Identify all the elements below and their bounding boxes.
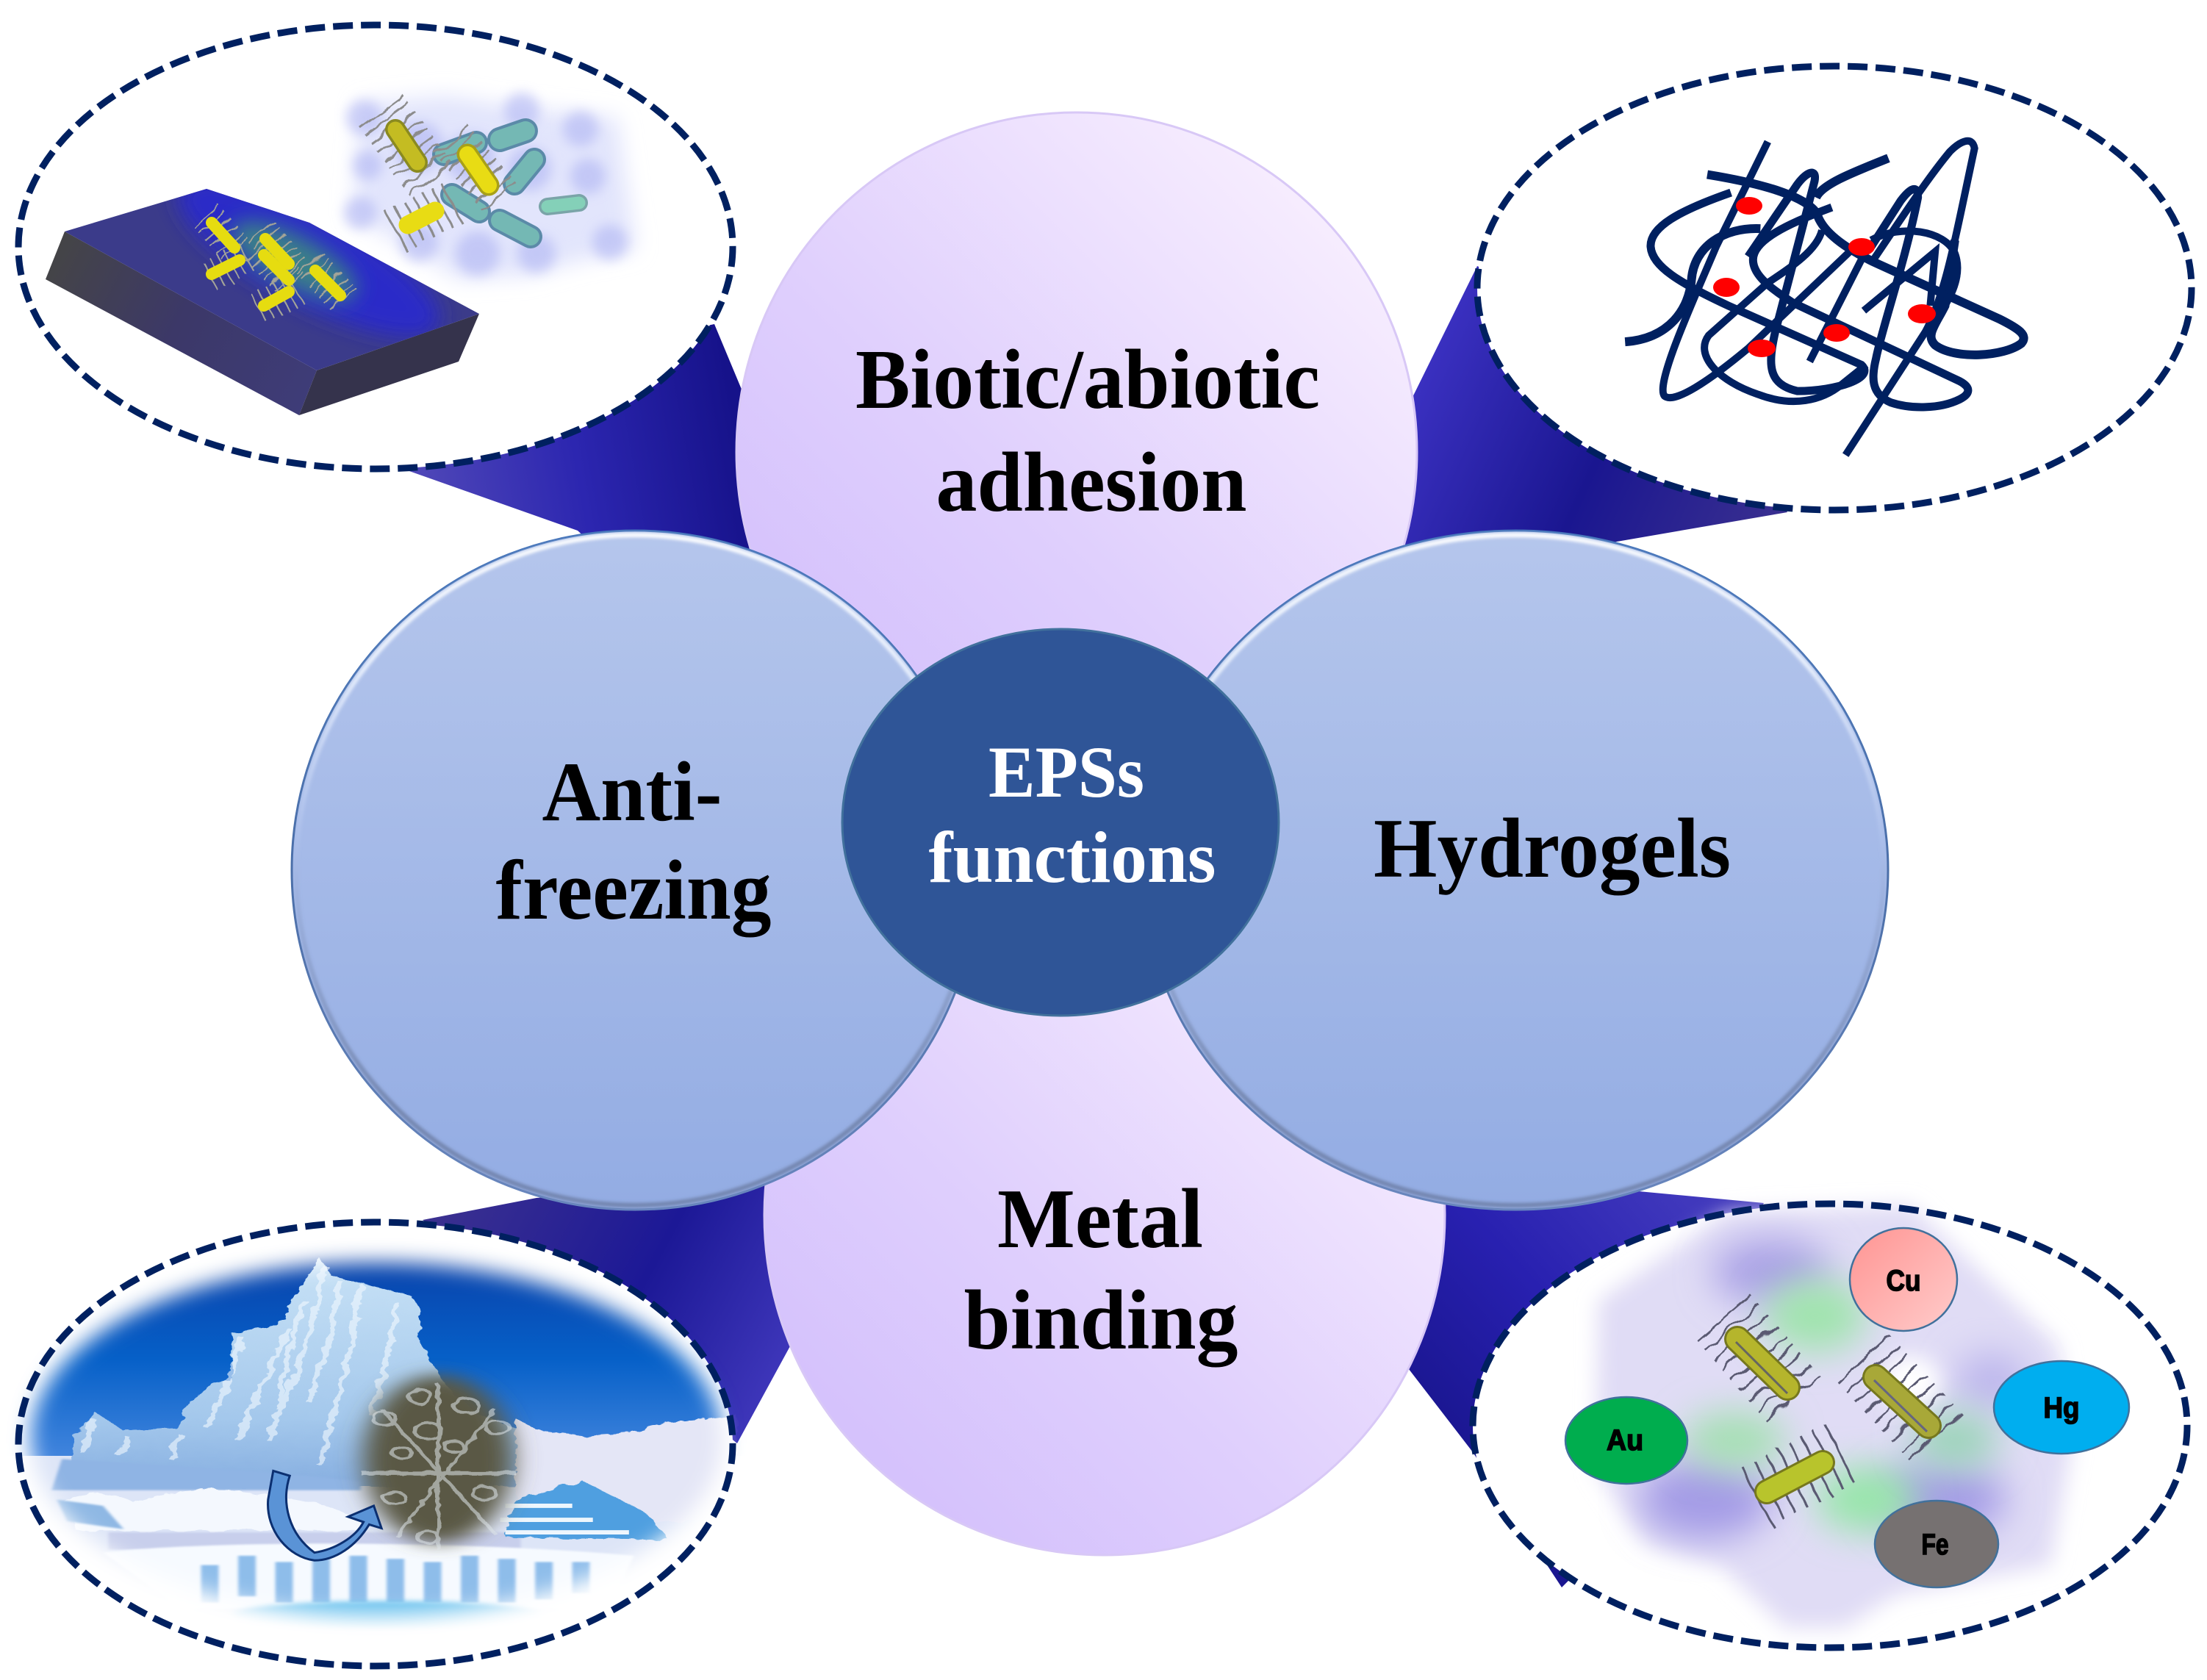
icon: three bacteria	[1723, 1317, 1940, 1501]
heading: functions: functions	[929, 816, 1216, 898]
panel: hydrogel network illustration	[1477, 66, 2192, 510]
callout wedge: bottom right	[1396, 1191, 1764, 1587]
heading: EPSs: EPSs	[988, 731, 1144, 813]
heading: Hydrogels: Hydrogels	[1374, 802, 1731, 896]
dashed callout border	[1473, 1204, 2187, 1648]
dashed callout border	[1477, 66, 2192, 510]
callout wedge: bottom left	[423, 1176, 808, 1443]
icon: Cu ion	[1850, 1228, 1957, 1331]
panel: central EPSs circle	[842, 629, 1279, 1016]
icon: yellow bacteria in cloud	[381, 110, 503, 235]
heading: Anti-: Anti-	[542, 745, 722, 839]
icon: Au ion: Au	[1607, 1424, 1643, 1457]
icon: snowflake	[361, 1375, 516, 1549]
icon: Fe ion: Fe	[1921, 1529, 1949, 1561]
heading: Biotic/abiotic adhesion: Biotic/abiotic	[855, 333, 1320, 427]
callout wedge: top right	[1382, 266, 1787, 566]
icon: Hg ion: Hg	[2043, 1392, 2080, 1424]
heading: binding: binding	[964, 1274, 1238, 1368]
heading: adhesion second line: adhesion	[936, 436, 1246, 530]
icon: Au ion	[1565, 1397, 1687, 1484]
icon: polymer network	[1625, 141, 2024, 455]
icon: EPS matrix cloud	[1596, 1205, 2073, 1628]
icon: Cu ion: Cu	[1886, 1265, 1921, 1297]
panel: metal binding illustration	[1473, 1204, 2187, 1648]
icon: bacteria on slab	[204, 217, 345, 310]
arrow: freezing curved arrow	[268, 1471, 381, 1560]
callout wedge: top left	[407, 324, 764, 581]
panel: biofilm adhesion illustration	[18, 25, 733, 469]
panel: anti-freezing iceberg illustration	[0, 1221, 808, 1666]
icon: Fe ion	[1875, 1501, 1998, 1587]
icon: floating EPS cloud	[344, 93, 636, 279]
icon: Hg ion	[1994, 1361, 2129, 1454]
panel: anti-freezing circle	[292, 531, 978, 1210]
dashed callout border	[18, 1222, 733, 1666]
icon: teal bacteria	[444, 131, 579, 237]
icon: substrate slab	[46, 189, 479, 415]
panel: hydrogels circle	[1143, 531, 1888, 1210]
icon: iceberg scene	[15, 1245, 738, 1629]
panel: metal binding circle	[764, 876, 1445, 1555]
heading: Metal: Metal	[997, 1172, 1203, 1266]
panel: biotic/abiotic adhesion circle	[736, 112, 1417, 791]
heading: freezing: freezing	[495, 844, 772, 938]
dashed callout border	[18, 25, 733, 469]
icon: red cross-link dots	[1713, 197, 1936, 357]
